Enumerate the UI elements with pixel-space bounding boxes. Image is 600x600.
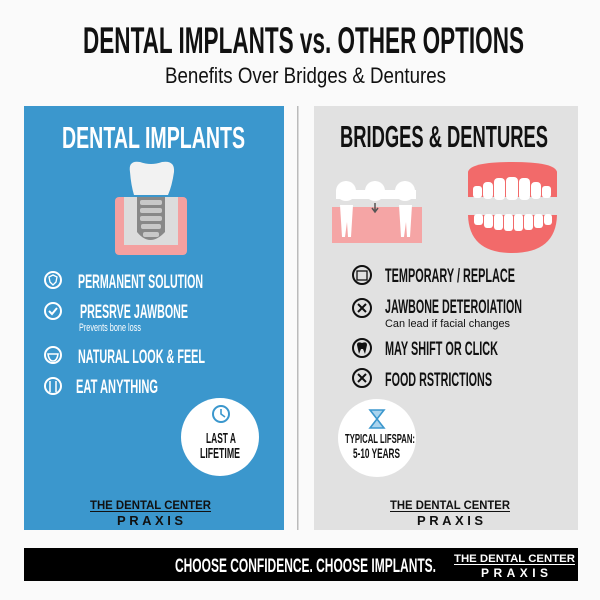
list item: eat anything: EAT ANYTHING (76, 377, 158, 398)
list item: natural look: NATURAL LOOK & FEEL (78, 347, 205, 368)
list item: jawbone deterioration (353, 297, 522, 330)
list item: preserve jawbone (45, 302, 188, 334)
logo: right: THE DENTAL CENTER (390, 500, 511, 512)
logo: left (90, 500, 212, 528)
icon: implant tooth (115, 162, 187, 255)
subtitle: Benefits Over Bridges & Dentures (165, 63, 446, 88)
heading: dental implants: DENTAL IMPLANTS (62, 120, 245, 155)
logo: right (390, 500, 511, 528)
list item: may shift (353, 339, 498, 360)
icon: bridge (332, 181, 422, 243)
footer bar (24, 548, 578, 581)
list item: food restrictions (353, 369, 492, 391)
badge: last a lifetime: LIFETIME (200, 445, 240, 462)
logo: left: PRAXIS (117, 513, 183, 528)
logo: left: THE DENTAL CENTER (90, 500, 212, 512)
logo: right: PRAXIS (417, 513, 483, 528)
list item: natural look (45, 347, 205, 368)
list item: permanent solution (45, 272, 203, 293)
logo: footer: PRAXIS (481, 566, 548, 580)
panel: bridges and dentures (314, 106, 578, 530)
list item: permanent solution: PERMANENT SOLUTION (78, 272, 203, 293)
badge: last a lifetime: LAST A (206, 430, 236, 447)
list item: preserve jawbone: Prevents bone loss (79, 322, 141, 334)
badge: typical lifespan (338, 399, 416, 477)
logo: footer: THE DENTAL CENTER (454, 553, 575, 565)
list item: eat anything (45, 377, 158, 398)
badge: typical lifespan: TYPICAL LIFSPAN: (345, 431, 415, 446)
icon: dentures (468, 162, 557, 253)
list item: jawbone deterioration: Can lead if facial changes (385, 318, 510, 330)
list item: food restrictions: FOOD RSTRICTIONS (385, 370, 492, 391)
tagline: CHOOSE CONFIDENCE. CHOOSE IMPLANTS. (175, 556, 436, 577)
list item: temporary (353, 266, 515, 287)
badge: typical lifespan: 5-10 YEARS (353, 445, 400, 461)
badge: last a lifetime (181, 398, 259, 476)
logo: footer (454, 553, 575, 580)
list item: preserve jawbone: PRESRVE JAWBONE (80, 302, 188, 323)
list item: may shift: MAY SHIFT OR CLICK (385, 339, 498, 360)
panel: dental implants (24, 106, 284, 530)
